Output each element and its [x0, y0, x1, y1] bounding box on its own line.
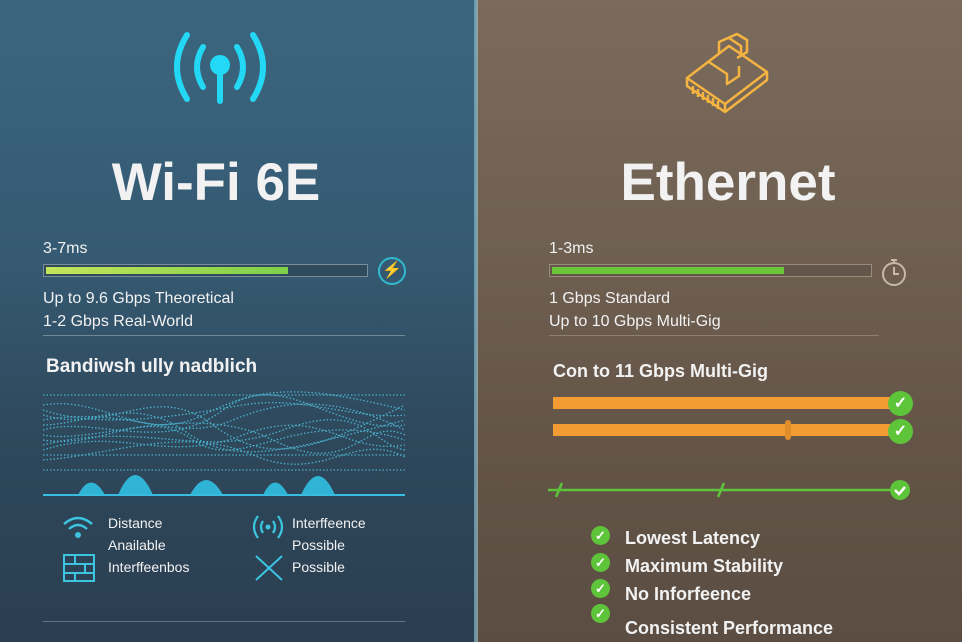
- legend: interference: [252, 515, 366, 581]
- bandwidth text: Up to 10 Gbps Multi-Gig: [549, 313, 721, 330]
- latency bar: [43, 264, 368, 277]
- legend: interference: Possible: [292, 559, 345, 575]
- icon: lightning: ⚡: [382, 262, 402, 279]
- title: Ethernet: Ethernet: [620, 153, 835, 212]
- legend: distance: Anailable: [108, 537, 166, 553]
- checklist: Consistent Performance: [625, 618, 833, 638]
- bars with checks: ✓: [894, 423, 907, 440]
- latency bar: [549, 264, 872, 277]
- green timeline: [548, 480, 910, 500]
- bandwidth text: 1-2 Gbps Real-World: [43, 313, 193, 330]
- bars with checks: ✓: [894, 395, 907, 412]
- legend: interference: Interffeence: [292, 515, 366, 531]
- icon: stopwatch: [882, 259, 906, 286]
- legend: distance: [63, 515, 189, 582]
- icon: wifi antenna: [174, 32, 266, 104]
- legend: interference: Possible: [292, 537, 345, 553]
- legend: distance: Distance: [108, 515, 162, 531]
- icon: ethernet plug: [686, 32, 768, 114]
- bandwidth text: 1 Gbps Standard: [549, 290, 670, 307]
- checklist: ✓: [595, 555, 606, 570]
- checklist: Lowest Latency: [625, 528, 760, 548]
- subheading: Bandiwsh ully nadblich: [46, 356, 257, 377]
- bandwidth text: [549, 290, 721, 330]
- checklist: ✓: [595, 606, 606, 621]
- panel: wifi: [0, 0, 478, 642]
- title: Wi-Fi 6E: Wi-Fi 6E: [112, 153, 320, 212]
- checklist: [591, 526, 833, 638]
- checklist: ✓: [595, 581, 606, 596]
- checklist: Maximum Stability: [625, 556, 783, 576]
- bandwidth text: Up to 9.6 Gbps Theoretical: [43, 290, 234, 307]
- latency label: 3-7ms: [43, 240, 87, 257]
- divider glow: [474, 0, 480, 642]
- subheading: Con to 11 Gbps Multi-Gig: [553, 361, 768, 381]
- bars with checks: [553, 391, 913, 444]
- icon: lightning: [378, 257, 406, 285]
- legend: distance: Interffeenbos: [108, 559, 189, 575]
- chart: waves: [43, 391, 405, 496]
- panel: ethernet: [478, 0, 962, 642]
- checklist: ✓: [595, 528, 606, 543]
- checklist: No Inforfeence: [625, 584, 751, 604]
- bandwidth text: [43, 290, 234, 330]
- latency label: 1-3ms: [549, 240, 593, 257]
